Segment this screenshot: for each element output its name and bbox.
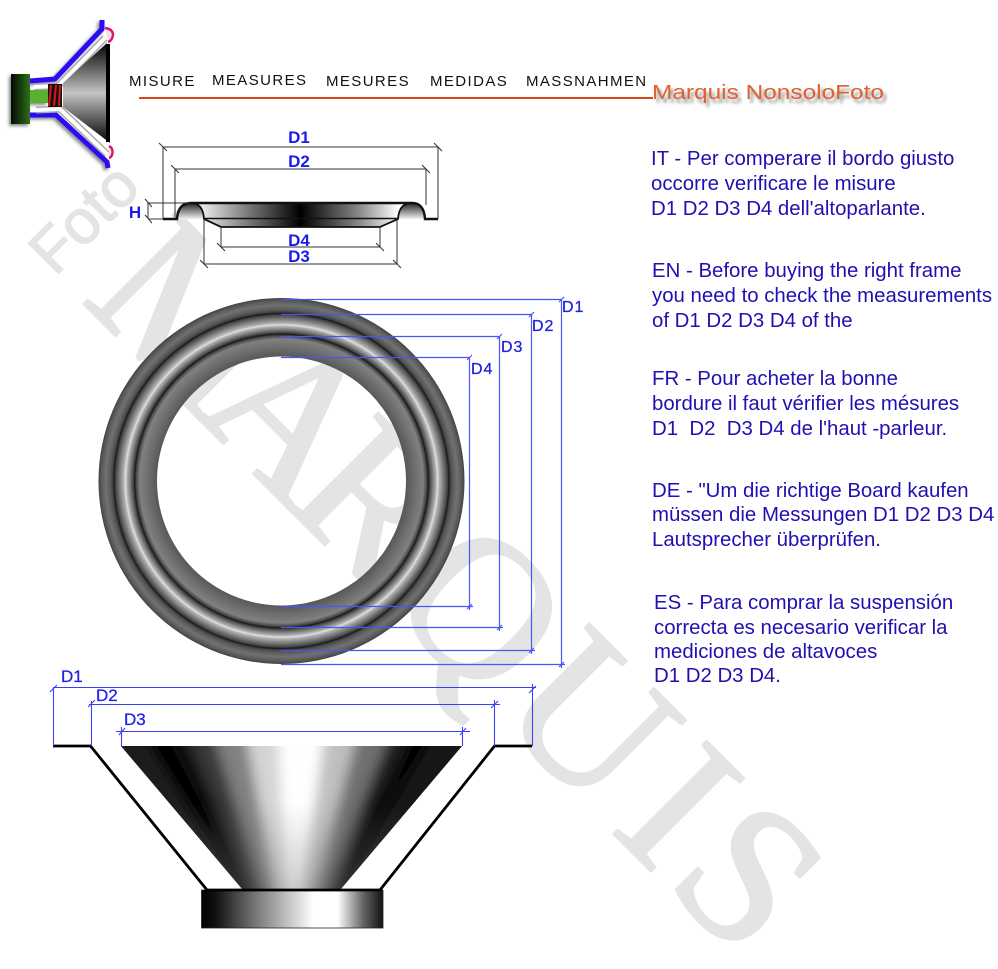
logo frame xyxy=(30,20,108,168)
German text: DE - "Um die richtige Board kaufen xyxy=(652,480,969,502)
ring labels xyxy=(471,299,584,378)
French text xyxy=(652,368,959,440)
Spanish text: mediciones de altavoces xyxy=(654,641,877,663)
watermark: Foto MARQUIS xyxy=(16,150,867,969)
header labels xyxy=(129,72,648,90)
French text: bordure il faut vérifier les mésures xyxy=(652,393,959,415)
logo spider tube xyxy=(34,38,107,154)
logo pole piece xyxy=(30,90,48,103)
ring labels: D1 xyxy=(562,299,584,316)
instructions text xyxy=(651,148,994,687)
profile dimension lines xyxy=(145,143,442,268)
profile labels: H xyxy=(129,203,141,222)
Italian text: IT - Per comperare il bordo giusto xyxy=(651,148,954,170)
French text: D1 D2 D3 D4 de l'haut -parleur. xyxy=(652,418,947,440)
German text: Lautsprecher überprüfen. xyxy=(652,529,881,551)
header rule xyxy=(139,97,653,99)
speaker dimension lines xyxy=(50,684,536,746)
Spanish text: D1 D2 D3 D4. xyxy=(654,665,781,687)
diagram: speaker basket side view xyxy=(50,667,536,928)
logo cone xyxy=(63,43,110,143)
profile body xyxy=(163,203,438,227)
ring labels: D4 xyxy=(471,361,493,378)
English text: of D1 D2 D3 D4 of the xyxy=(652,310,853,332)
speaker labels xyxy=(61,667,146,729)
logo: speaker cross-section xyxy=(11,20,113,168)
brand name: Marquis NonsoloFoto xyxy=(652,82,884,104)
label: MASSNAHMEN xyxy=(526,73,648,90)
Spanish text: correcta es necesario verificar la xyxy=(654,617,948,639)
English text: you need to check the measurements xyxy=(652,285,992,307)
English text: EN - Before buying the right frame xyxy=(652,260,961,282)
watermark word MARQUIS: MARQUIS xyxy=(49,175,867,969)
label: MISURE xyxy=(129,73,196,90)
English text xyxy=(652,260,992,332)
ring xyxy=(98,298,464,664)
logo magnet xyxy=(11,74,48,124)
profile labels: D3 xyxy=(288,247,310,266)
logo surround xyxy=(105,28,113,158)
diagram: surround side profile xyxy=(129,128,442,268)
Italian text: occorre verificare le misure xyxy=(651,173,896,195)
diagram: surround ring top view xyxy=(98,297,584,668)
watermark word Foto: Foto xyxy=(16,150,153,287)
speaker magnet xyxy=(202,890,383,928)
profile labels: D1 xyxy=(288,128,310,147)
label: MEASURES xyxy=(212,72,307,89)
French text: FR - Pour acheter la bonne xyxy=(652,368,898,390)
logo cone edge xyxy=(106,44,110,142)
ring dimension lines xyxy=(281,297,565,668)
ring labels: D2 xyxy=(532,318,554,335)
speaker labels: D3 xyxy=(124,710,146,729)
Spanish text: ES - Para comprar la suspensión xyxy=(654,592,953,614)
ring labels: D3 xyxy=(501,339,523,356)
Italian text xyxy=(651,148,954,220)
Spanish text xyxy=(654,592,953,687)
German text: müssen die Messungen D1 D2 D3 D4 xyxy=(652,504,994,526)
profile labels: D2 xyxy=(288,152,310,171)
profile labels xyxy=(129,128,310,266)
label: MESURES xyxy=(326,73,410,90)
label: MEDIDAS xyxy=(430,73,508,90)
brand name xyxy=(652,82,887,108)
Italian text: D1 D2 D3 D4 dell'altoparlante. xyxy=(651,198,926,220)
speaker basket outline xyxy=(53,746,532,890)
brand name: Marquis NonsoloFoto xyxy=(655,86,887,108)
speaker labels: D1 xyxy=(61,667,83,686)
German text xyxy=(652,480,994,551)
speaker labels: D2 xyxy=(96,686,118,705)
speaker cone xyxy=(121,746,462,889)
profile labels: D4 xyxy=(288,231,310,250)
logo voice coil xyxy=(48,84,62,107)
